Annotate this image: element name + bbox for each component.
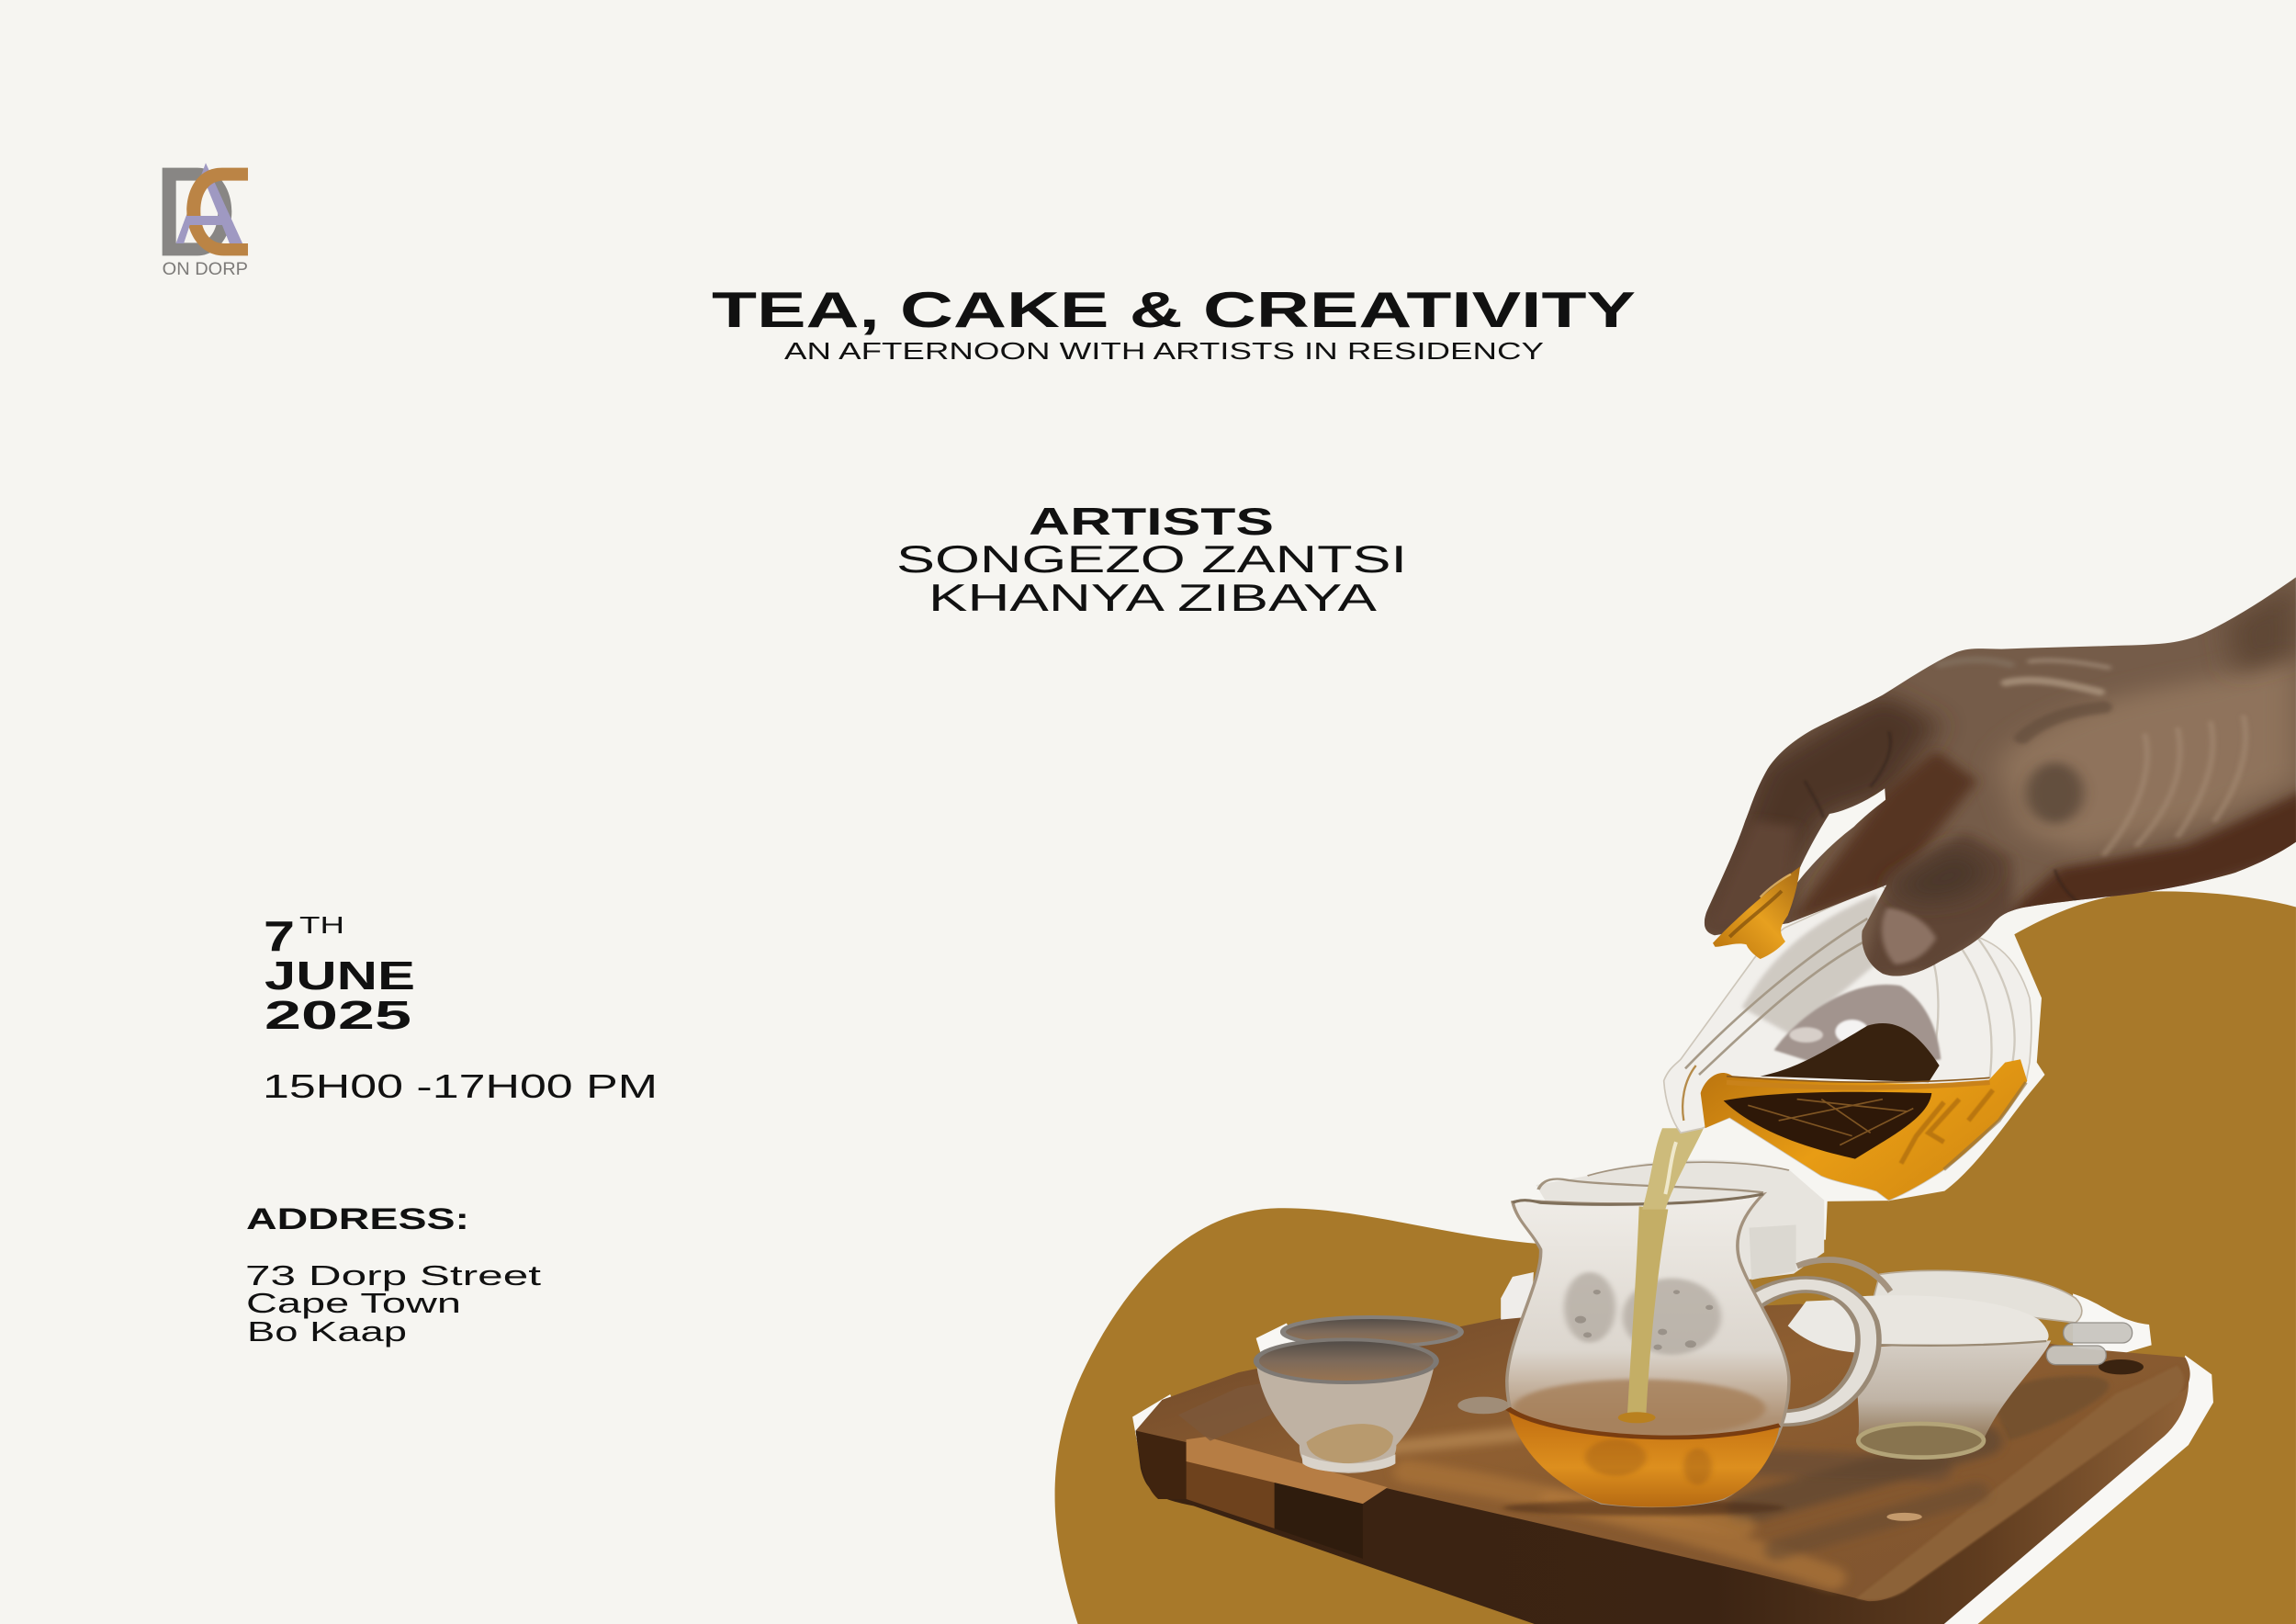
logo: DAC on Dorp [163,163,248,279]
stream inside jug [1627,1206,1668,1415]
address line one: 73 Dorp Street [245,1259,542,1291]
rear bowl interior [1874,1270,2082,1323]
condensation bubbles [1564,1272,1721,1355]
tray top surface [1136,1304,2190,1601]
title: TEA, CAKE & CREATIVITY [712,281,1636,338]
logo: DAC on Dorp: ON DORP [163,260,248,279]
tray chamfer band [1856,1366,2184,1600]
rear jug handle echo [1797,1260,1890,1291]
lid ribs [1685,919,1867,1075]
tray recess [1993,1376,2109,1441]
address heading: ADDRESS: [246,1202,469,1235]
middle finger warm tone [1788,750,1977,923]
inner dome reflection [1774,985,1941,1075]
hand base tone [1705,577,2296,976]
front cup body [1256,1357,1436,1473]
palm underside [2001,787,2296,919]
white cutout halos [1132,1293,2213,1624]
froth zone [1513,1380,1765,1438]
finger creases [1805,732,2079,903]
front bowl rim line [1876,1341,2046,1346]
jug glass body [1507,1194,1789,1506]
white backing behind bowl [1788,1298,1880,1353]
thumb upper shade [1897,847,1987,904]
fingertip tone [1703,820,1796,930]
date block [263,911,658,1105]
rear cup [1283,1317,1461,1347]
ochre blob and tray [1055,891,2296,1624]
index finger shade [1694,692,1940,937]
address block [245,1202,542,1348]
address line two: Cape Town [246,1287,461,1319]
photo illustration: tea pouring over ochre blob [1055,551,2296,1624]
tea surface line [1508,1408,1780,1438]
back glass pitchers [1501,1160,1824,1320]
stream landing splash [1618,1412,1656,1423]
tea stream from spout [1642,1128,1704,1210]
thumb nail [1882,908,1936,964]
subtitle: AN AFTERNOON WITH ARTISTS IN RESIDENCY [784,339,1544,365]
dark web crease [2026,762,2084,824]
date day: 7 [264,912,295,960]
jug handle [1754,1284,1868,1418]
artists heading: ARTISTS [1029,500,1274,543]
artist name one: SONGEZO ZANTSI [896,537,1407,581]
wood grain streaks [1390,1434,1985,1578]
date ordinal suffix: TH [299,911,344,939]
coaster [1458,1397,1509,1414]
left glass cups and tray details [1256,1317,1509,1473]
leaves above water [1761,1023,1940,1082]
knuckle highlights [1940,660,2109,738]
tray chip [1886,1513,1922,1521]
tray rim inner shade [1178,1376,1302,1441]
tea body in gaiwan [1701,1059,2027,1201]
wooden tray [1136,1304,2190,1624]
artist name two: KHANYA ZIBAYA [929,576,1377,619]
date month: JUNE [264,953,415,998]
address line three: Bo Kaap [247,1315,407,1348]
front bowl interior [1853,1295,2049,1345]
lid frosted surface [1742,894,1883,1035]
hand [1705,577,2296,976]
artists block [896,500,1407,619]
palm wrinkles [2104,716,2245,854]
gaiwan glass body [1664,885,2032,1201]
jug rim [1513,1194,1763,1204]
glass reflection in tea [1901,1090,1993,1164]
bowl handle knobs [2046,1323,2133,1365]
gaiwan lid knob [1713,866,1800,959]
back of hand light [1998,652,2296,851]
event time: 15H00 -17H00 PM [263,1067,658,1105]
thumb base [1858,833,2014,980]
glass gaiwan [1664,885,2032,1201]
tray light edge strip [1187,1437,1388,1504]
heading block [712,281,1636,365]
wrist shade [2227,581,2296,673]
tray front face [1136,1376,2189,1624]
tea in jug [1508,1408,1780,1507]
tray handle notch [2099,1359,2144,1374]
date year: 2025 [264,993,411,1038]
tea turbulence [1585,1439,1712,1485]
front cup rim [1256,1339,1436,1382]
gaiwan right rim [1944,1082,2026,1169]
front bowl body [1857,1340,2051,1439]
gap between fingers [1795,788,1885,886]
glass jug [1503,1194,1868,1516]
tea surface highlight [1727,1082,1990,1088]
right glass bowls [1788,1260,2133,1458]
jug shadow [1503,1500,1784,1516]
bowl base [1858,1424,1984,1458]
gaiwan right ridges [1929,934,2015,1077]
submerged leaves [1724,1092,1931,1159]
